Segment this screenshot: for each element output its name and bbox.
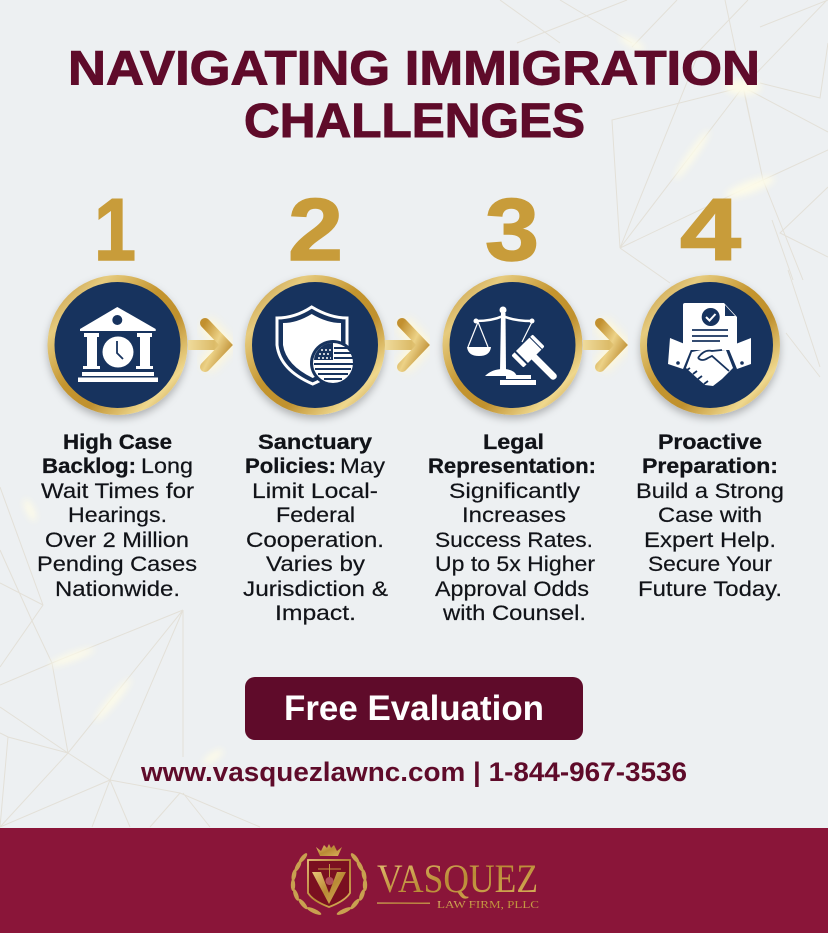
text: high case backlog: Backlog:: [42, 454, 136, 478]
text: high case backlog: Long: [141, 454, 193, 478]
text: high case backlog: Over 2 Million: [45, 528, 189, 552]
text: high case backlog: Nationwide.: [55, 577, 180, 601]
text: high case backlog: Hearings.: [68, 503, 167, 527]
step 3: [428, 180, 596, 625]
text: proactive preparation: Proactive: [658, 430, 762, 454]
icon: shield with flag: [245, 275, 385, 415]
step 4: [636, 180, 784, 601]
button: free evaluation: [245, 677, 583, 740]
logo: shield: [308, 860, 350, 907]
arrow 1: [188, 323, 226, 367]
text: legal representation: Increases: [462, 503, 566, 527]
title: [68, 42, 760, 148]
logo: wordmark: VASQUEZ: [377, 856, 538, 901]
text: high case backlog: Wait Times for: [41, 479, 194, 503]
text: sanctuary policies: Varies by: [266, 552, 365, 576]
text: legal representation: Significantly: [449, 479, 580, 503]
text: high case backlog: Pending Cases: [37, 552, 197, 576]
arrow 3: [583, 323, 621, 367]
text: proactive preparation: Build a Strong: [636, 479, 784, 503]
contact line: www.vasquezlawnc.com | 1-844-967-3536: [140, 757, 687, 787]
text: legal representation: Legal: [483, 430, 544, 454]
text: high case backlog: [37, 430, 197, 601]
text: sanctuary policies: Sanctuary: [258, 430, 372, 454]
step 2: [243, 180, 388, 625]
text: legal representation: with Counsel.: [442, 601, 586, 625]
text: sanctuary policies: Cooperation.: [246, 528, 384, 552]
number 3: 3: [485, 180, 539, 279]
footer band: [0, 828, 828, 933]
logo: [291, 844, 539, 916]
title: CHALLENGES: [244, 95, 585, 148]
icon: scales and gavel: [442, 275, 582, 415]
logo: laurel wreath: [291, 852, 367, 916]
text: legal representation: [428, 430, 596, 625]
number 4: 4: [680, 180, 741, 279]
icon: courthouse with clock: [48, 275, 188, 415]
text: proactive preparation: Expert Help.: [644, 528, 776, 552]
text: sanctuary policies: May: [340, 454, 385, 478]
text: legal representation: Success Rates.: [435, 528, 593, 552]
background sparkles: [21, 33, 776, 767]
text: legal representation: Approval Odds: [435, 577, 589, 601]
button: free evaluation: Free Evaluation: [284, 689, 544, 728]
text: sanctuary policies: Policies:: [245, 454, 336, 478]
text: sanctuary policies: Federal: [276, 503, 355, 527]
text: sanctuary policies: Limit Local-: [252, 479, 378, 503]
text: proactive preparation: Preparation:: [642, 454, 778, 478]
number 1: 1: [94, 180, 136, 279]
text: sanctuary policies: [243, 430, 388, 625]
logo: wordmark: LAW FIRM, PLLC: [437, 899, 539, 911]
text: proactive preparation: Future Today.: [638, 577, 782, 601]
number 2: 2: [288, 180, 343, 279]
text: proactive preparation: Case with: [658, 503, 762, 527]
arrow 2: [385, 323, 423, 367]
icon: document and handshake: [640, 275, 780, 415]
text: sanctuary policies: Jurisdiction &: [243, 577, 388, 601]
text: legal representation: Representation:: [428, 454, 596, 478]
text: high case backlog: High Case: [63, 430, 172, 454]
text: legal representation: Up to 5x Higher: [435, 552, 595, 576]
text: proactive preparation: [636, 430, 784, 601]
logo: crown: [316, 844, 342, 856]
title: NAVIGATING IMMIGRATION: [68, 42, 760, 96]
text: proactive preparation: Secure Your: [648, 552, 772, 576]
step 1: [37, 180, 197, 601]
text: sanctuary policies: Impact.: [275, 601, 356, 625]
